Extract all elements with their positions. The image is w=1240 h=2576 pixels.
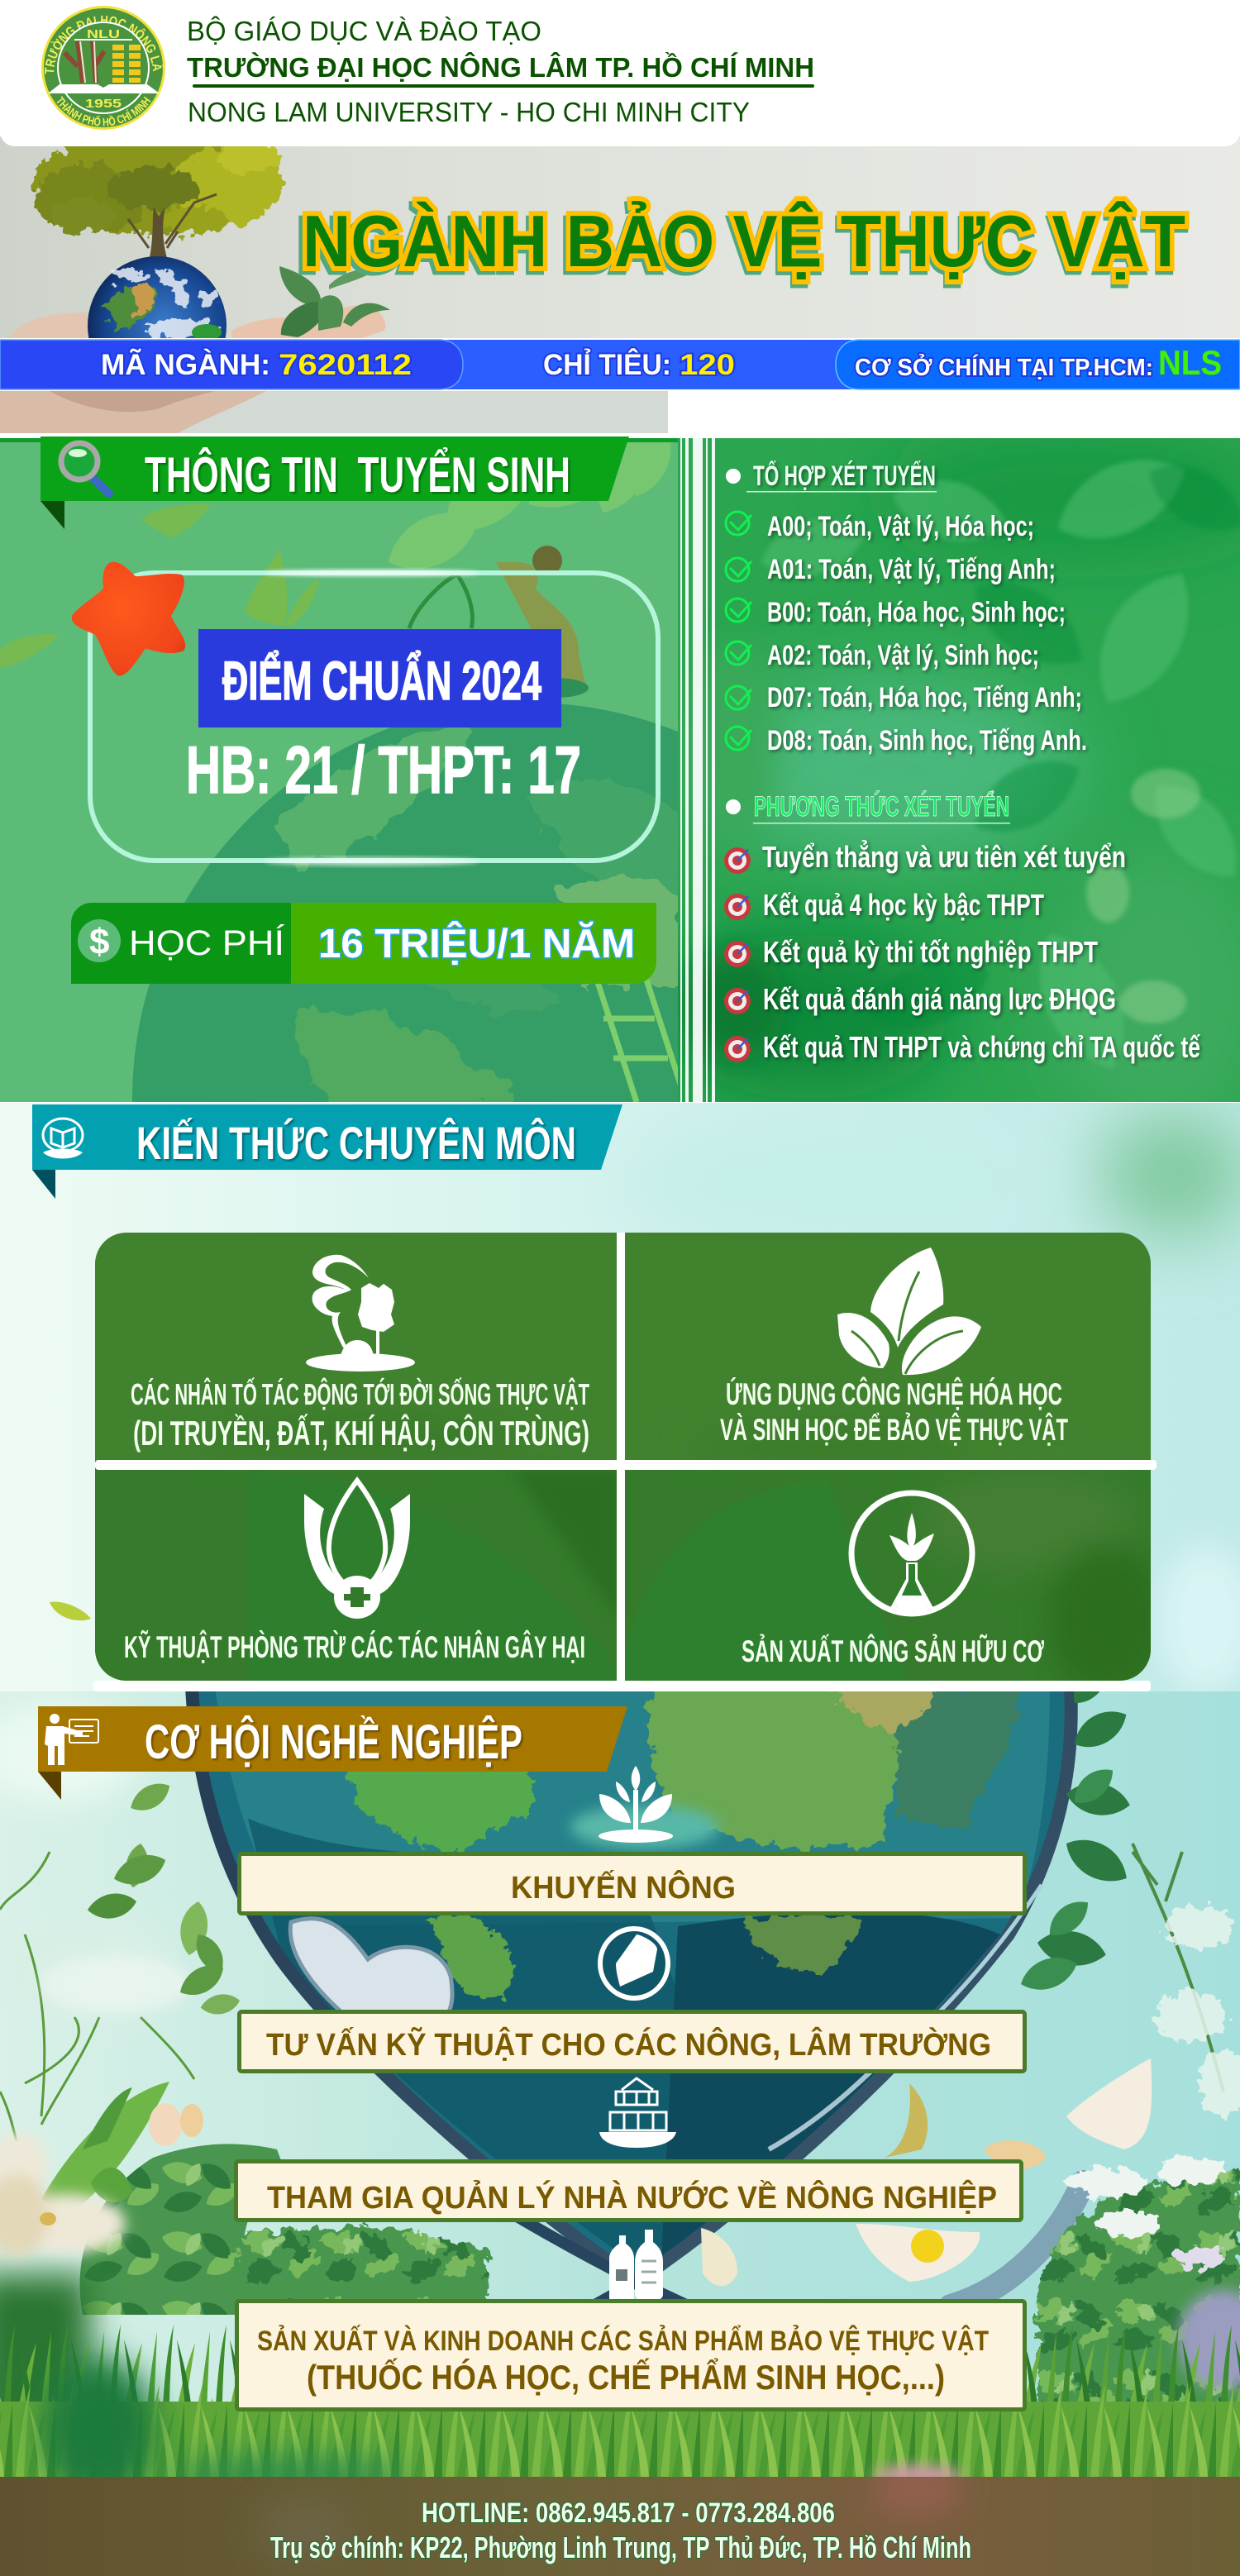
admission methods: PHƯƠNG THỨC XÉT TUYỂN	[754, 791, 1009, 823]
method list: Kết quả đánh giá năng lực ĐHQG	[763, 982, 1116, 1016]
card: factors affecting plants: CÁC NHÂN TỐ TÁC ĐỘNG TỚI ĐỜI SỐNG THỰC VẬT	[131, 1376, 589, 1411]
career: production and trade of plant protection products: (THUỐC HÓA HỌC, CHẾ PHẨM SINH HỌC,...)	[307, 2357, 945, 2397]
icon: three leaves	[837, 1247, 981, 1375]
method list	[762, 839, 1201, 1064]
combination list: D07: Toán, Hóa học, Tiếng Anh;	[767, 682, 1082, 713]
card: organic production	[742, 1493, 1044, 1668]
card: pest control techniques: KỸ THUẬT PHÒNG TRỪ CÁC TÁC NHÂN GÂY HẠI	[124, 1629, 585, 1664]
quota	[543, 348, 735, 381]
tuition: HỌC PHÍ	[129, 923, 284, 963]
header: university name: NONG LAM UNIVERSITY - HO CHI MINH CITY	[188, 97, 750, 127]
combination list: A00; Toán, Vật lý, Hóa học;	[767, 511, 1034, 542]
card: chemistry and biology applications	[720, 1247, 1068, 1447]
section banner: expertise	[32, 1104, 622, 1199]
footer	[0, 2477, 1240, 2576]
career: state management	[236, 2161, 1022, 2221]
campus pill	[836, 340, 1240, 389]
quota: 120	[680, 349, 735, 381]
header: university name: TRƯỜNG ĐẠI HỌC NÔNG LÂM TP. HỒ CHÍ MINH	[187, 51, 814, 83]
panel: admissions background	[0, 438, 1240, 1102]
combination list: B00: Toán, Hóa học, Sinh học;	[767, 597, 1066, 628]
header: university logo: THÀNH PHỐ HỒ CHÍ MINH	[56, 96, 150, 126]
hero image: lower part of hand	[0, 391, 668, 433]
footer: Trụ sở chính: KP22, Phường Linh Trung, TP Thủ Đức, TP. Hồ Chí Minh	[270, 2531, 971, 2564]
major code pill	[0, 340, 463, 389]
score heading	[198, 629, 561, 727]
combination list: D08: Toán, Sinh học, Tiếng Anh.	[767, 725, 1087, 756]
quota: CHỈ TIÊU:	[543, 348, 671, 381]
panel: careers background with heart globe and meadow	[0, 1657, 1240, 2505]
career: agricultural extension: KHUYẾN NÔNG	[511, 1868, 736, 1906]
heart globe	[192, 1686, 1071, 2282]
subject combinations: TỔ HỢP XÉT TUYỂN	[753, 460, 936, 492]
campus pill: CƠ SỞ CHÍNH TẠI TP.HCM:	[855, 353, 1153, 381]
hero image: plant and globe in hand	[0, 136, 1240, 338]
icon: magnifier	[61, 443, 109, 494]
icons: targets	[724, 847, 751, 1062]
header: university name	[187, 16, 814, 127]
method list: Tuyển thẳng và ưu tiên xét tuyển	[762, 839, 1126, 874]
header: university logo: NLU	[87, 27, 120, 41]
card: pest control techniques	[124, 1481, 585, 1664]
career: production and trade of plant protection products	[236, 2302, 1025, 2409]
icon: presenter and board	[45, 1714, 98, 1765]
icon: building	[599, 2078, 676, 2148]
icon: dollar coin: $	[89, 922, 109, 962]
icons: check marks	[726, 512, 751, 750]
foliage right	[701, 1657, 1240, 2477]
foliage left	[0, 1717, 488, 2497]
title: NGÀNH BẢO VỆ THỰC VẬT	[303, 200, 1185, 282]
stethoscope tubes and chestpiece	[290, 1919, 1083, 2340]
combination list: A02: Toán, Vật lý, Sinh học;	[767, 640, 1039, 671]
footer: HOTLINE: 0862.945.817 - 0773.284.806	[422, 2497, 835, 2529]
admission methods	[724, 791, 1201, 1064]
card: chemistry and biology applications: ỨNG DỤNG CÔNG NGHỆ HÓA HỌC	[726, 1376, 1062, 1411]
score card	[72, 562, 658, 866]
section banner: admissions info	[41, 436, 629, 529]
tuition	[71, 903, 656, 984]
header: university name: BỘ GIÁO DỤC VÀ ĐÀO TẠO	[187, 16, 541, 46]
icon: sprout	[599, 1766, 673, 1843]
icon: red star	[72, 562, 185, 676]
subject combinations	[726, 460, 1087, 756]
expertise grid	[93, 1233, 1166, 1695]
method list: Kết quả kỳ thi tốt nghiệp THPT	[763, 935, 1098, 969]
campus pill: NLS	[1158, 343, 1222, 382]
career: production and trade of plant protection products: SẢN XUẤT VÀ KINH DOANH CÁC SẢN PHẨM BẢO VỆ THỰC VẬT	[257, 2326, 989, 2357]
grass	[0, 2325, 1240, 2477]
score values: HB: 21 / THPT: 17	[186, 733, 581, 808]
panel: expertise background	[0, 1103, 1240, 1695]
icon: flask with plant	[851, 1493, 972, 1614]
method list: Kết quả 4 học kỳ bậc THPT	[763, 888, 1044, 922]
icon: hand in circle	[600, 1929, 668, 1998]
icon: dollar coin	[78, 919, 121, 962]
header background	[0, 0, 1240, 146]
major code pill: MÃ NGÀNH:	[101, 348, 270, 381]
combination list: A01: Toán, Vật lý, Tiếng Anh;	[767, 554, 1056, 585]
info band	[0, 338, 1240, 391]
career: technical consulting: TƯ VẤN KỸ THUẬT CHO CÁC NÔNG, LÂM TRƯỜNG	[266, 2025, 991, 2063]
career: technical consulting	[240, 2012, 1025, 2072]
section banner: admissions info: THÔNG TIN TUYỂN SINH	[145, 447, 570, 503]
icon: open book emblem	[43, 1119, 83, 1159]
card: factors affecting plants: (DI TRUYỀN, ĐẤT, KHÍ HẬU, CÔN TRÙNG)	[133, 1413, 589, 1453]
score heading: ĐIỂM CHUẨN 2024	[222, 650, 541, 711]
title: NGÀNH BẢO VỆ THỰC VẬT	[298, 204, 1185, 286]
header: university logo: 1955	[85, 97, 122, 111]
card: factors affecting plants	[131, 1255, 589, 1453]
section banner: expertise: KIẾN THỨC CHUYÊN MÔN	[136, 1117, 576, 1169]
section banner: careers: CƠ HỘI NGHỀ NGHIỆP	[145, 1715, 522, 1769]
header: university logo	[41, 6, 165, 130]
icon: soil, wind and tree	[306, 1255, 415, 1371]
icon: bottles	[609, 2230, 663, 2300]
career: agricultural extension	[240, 1853, 1025, 1913]
tuition: 16 TRIỆU/1 NĂM	[318, 921, 635, 966]
icon: lotus with cross	[304, 1481, 410, 1619]
combination list	[767, 511, 1087, 756]
card: organic production: SẢN XUẤT NÔNG SẢN HỮU CƠ	[742, 1634, 1044, 1668]
major code pill: 7620112	[279, 349, 412, 381]
career: state management: THAM GIA QUẢN LÝ NHÀ NƯỚC VỀ NÔNG NGHIỆP	[267, 2178, 997, 2216]
section banner: careers	[38, 1706, 627, 1800]
